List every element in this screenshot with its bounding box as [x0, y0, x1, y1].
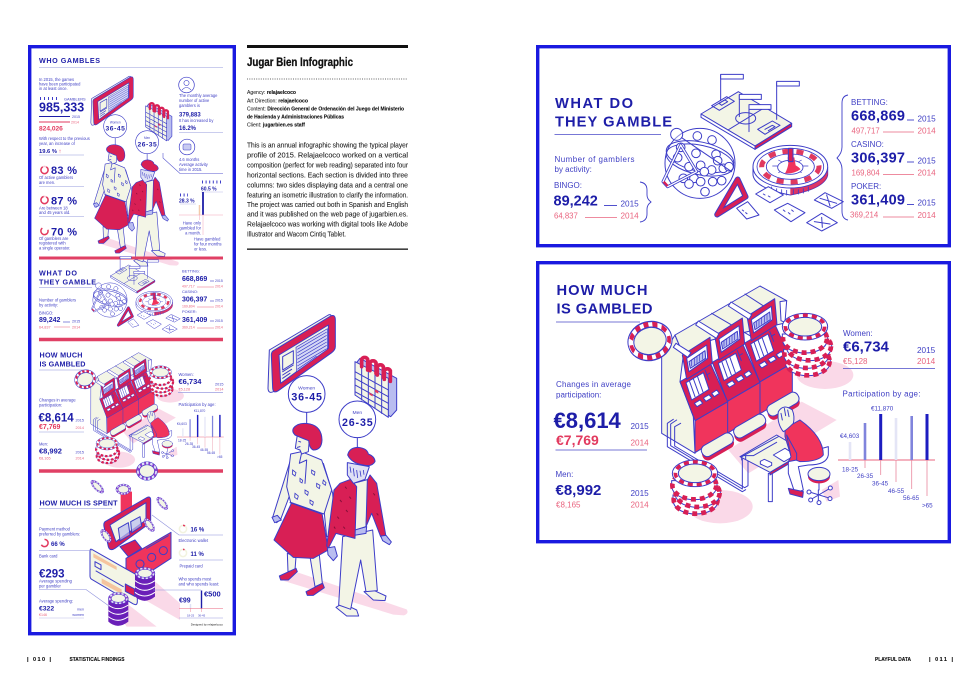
body text: Relajaelcoco was working with digital tools like Adobe: [247, 222, 408, 228]
text block: other payment methods and spending chart: €500: [204, 590, 221, 598]
stat: 70 percent single operator: Of gamblers are: [39, 236, 69, 241]
text block: games intro and total gamblers: GAMBLERS: [64, 96, 86, 102]
text block: average participation: 2015: [630, 422, 649, 431]
text block: average participation small: participation:: [39, 402, 62, 408]
text block: bingo small: by activity:: [39, 302, 58, 308]
bingo counts: BINGO:: [554, 181, 582, 190]
betting casino poker counts: CASINO:: [851, 140, 884, 149]
stat: 83 percent of gamblers are men: Of active gamblers: [39, 175, 73, 180]
text block: payment method: €322: [39, 606, 54, 612]
text block: betting casino poker small: 497,717: [182, 284, 195, 288]
chart: participation by age small: [177, 415, 224, 454]
back red box: [126, 532, 171, 581]
text block: other payment methods and spending chart: 18-25: [187, 614, 195, 618]
footer: right folio: [875, 657, 953, 663]
chip stack left: [672, 460, 720, 514]
text block: payment method: €146: [39, 613, 47, 617]
text block: monthly active gamblers: number of active: [179, 98, 210, 103]
credits: Client: jugarbien.es staff: [247, 122, 305, 128]
man head: [347, 463, 369, 483]
text block: payment method: Average spending: [39, 578, 73, 584]
text block: average participation: €8,614: [554, 408, 622, 433]
panel: project description: [247, 45, 409, 250]
panel: full vertical infographic: [30, 47, 234, 634]
text block: average participation small: €8,614: [38, 412, 74, 424]
text block: women small: 2014: [215, 388, 223, 392]
chart labels: 26-35: [857, 473, 874, 480]
coin stack right: [135, 567, 155, 601]
heading: what do they gamble small: WHAT DO: [39, 268, 77, 278]
chart labels small: [177, 409, 223, 459]
age bubble men: 26-35: [342, 417, 373, 429]
woman arms: [273, 462, 335, 537]
text block: payment method: per gambler: [39, 584, 61, 588]
man trousers: [339, 530, 377, 609]
body text: This is an annual infographic showing the typical player: [247, 142, 409, 150]
text block: bingo small: 2014: [72, 326, 80, 330]
bingo counts: 64,837: [554, 212, 578, 220]
body text: [247, 142, 409, 238]
bingo counts: Number of gamblers: [554, 155, 634, 164]
age bubble women: 36-45: [291, 392, 322, 404]
bingo counts: by activity:: [554, 165, 592, 174]
text block: betting casino poker small: 2015: [215, 319, 223, 323]
text block: average participation small: €8,992: [39, 446, 62, 456]
betting casino poker counts: 169,804: [852, 168, 880, 178]
heading: how much is gambled: IS GAMBLED: [556, 302, 652, 318]
text block: payment method: Bank card: [39, 554, 58, 558]
monitor stand: [120, 540, 142, 557]
text block: payment method: preferred by gamblers:: [39, 532, 80, 536]
age bubble men: Men: [352, 410, 362, 416]
chart labels: €11,870: [871, 406, 894, 412]
text block: other payment methods and spending chart: 11 %: [190, 552, 205, 558]
body text: columns: two sides displaying data and a central one: [247, 182, 408, 190]
text block: betting casino poker small: 2014: [215, 326, 223, 330]
chart: months gambled: for four months: [194, 242, 222, 246]
heading: how much is gambled small: HOW MUCH: [40, 350, 82, 360]
text block: betting casino poker small: 169,804: [182, 304, 195, 308]
text block: activity time: [163, 139, 223, 174]
chart: months gambled: Have only: [183, 220, 202, 226]
chart: months gambled: or less.: [194, 246, 207, 252]
credits: Content: Dirección General de Ordenación del Juego del Ministerio: [247, 106, 404, 112]
stat: 70 percent single operator: a single operator.: [39, 246, 70, 250]
credits: Agency: relajaelcoco: [247, 90, 296, 96]
body text: Illustrator and Wacom Cintiq Tablet.: [247, 232, 346, 238]
chart labels small: 36-45: [192, 445, 200, 449]
text block: average participation small: [38, 398, 84, 460]
betting casino poker counts: 2014: [918, 168, 936, 178]
body text: and it was published on the web page of jugarbien.es.: [247, 212, 408, 218]
cables: [667, 419, 748, 492]
text block: average participation: [554, 380, 649, 510]
head: [778, 407, 794, 432]
title: Jugar Bien Infographic: [247, 55, 353, 69]
chart labels: 36-45: [872, 480, 889, 488]
text block: average participation: Men:: [556, 470, 573, 479]
woman hair: [293, 423, 322, 450]
chart labels small: 56-65: [207, 451, 215, 455]
text block: games intro and total gamblers: 2015: [72, 115, 80, 119]
woman shirt: [287, 452, 332, 514]
text block: women small: 2015: [215, 382, 223, 386]
text block: other payment methods and spending chart: Who spends most: [178, 576, 212, 582]
man shirt: [353, 479, 368, 530]
chart labels: 56-65: [903, 495, 920, 502]
betting casino poker counts: 668,869: [851, 108, 905, 124]
icon: chip on divider: [136, 462, 158, 480]
woman shoes: [279, 568, 324, 595]
chart labels: €4,603: [840, 433, 860, 440]
man shoes: [336, 589, 386, 616]
torso: [785, 420, 823, 462]
playing cards: [737, 187, 843, 231]
betting casino poker counts: [837, 95, 936, 220]
stat: 87 percent aged 18 to 45: Are between 18: [39, 206, 68, 210]
betting casino poker counts: 2015: [918, 198, 936, 208]
text block: payment method: 66 %: [51, 542, 65, 548]
text block: games intro and total gamblers: have been participated: [39, 82, 81, 87]
text block: average participation: 2014: [630, 500, 649, 510]
text block: bingo small: 89,242: [39, 317, 61, 324]
text block: betting casino poker small: 2015: [215, 298, 223, 302]
man figure: [327, 447, 391, 616]
text block: activity time: time in 2015.: [179, 167, 202, 172]
credits: Art Direction: relajaelcoco: [247, 98, 308, 104]
slot machines: [680, 299, 792, 453]
section: how much is spent: [39, 478, 223, 627]
side wall and roof: [662, 335, 695, 453]
text block: games intro and total gamblers: in at least once.: [39, 86, 68, 91]
chart: months gambled: [179, 182, 223, 252]
stat: 83 percent of gamblers are men: [39, 165, 84, 186]
bingo counts: 2014: [620, 212, 639, 220]
chart labels: >65: [922, 502, 933, 510]
text block: monthly active gamblers: 16.2%: [179, 126, 197, 132]
betting casino poker counts: 361,409: [851, 192, 905, 208]
text block: games intro and total gamblers: 19.6 % ↑: [39, 149, 62, 155]
text block: other payment methods and spending chart: and who spends least:: [178, 582, 219, 586]
text block: bingo small: 64,837: [39, 326, 51, 330]
text block: games intro and total gamblers: year, an increase of: [39, 141, 76, 146]
text block: average participation small: Men:: [39, 442, 48, 446]
text block: bingo small: [39, 298, 80, 330]
drum handle: [671, 128, 683, 140]
body text: featuring an isometric illustration to clarify the information.: [247, 192, 408, 200]
text block: average participation: 2015: [630, 489, 649, 498]
footer: left folio: [27, 657, 125, 663]
text block: other payment methods and spending chart: Designed by relajaelcoco: [191, 622, 223, 626]
chart labels small: 46-55: [200, 448, 208, 452]
man hat: [348, 447, 375, 466]
text block: average participation: €7,769: [556, 432, 599, 448]
text block: other payment methods and spending chart: 16 %: [190, 528, 205, 534]
betting casino poker counts: 2015: [918, 114, 936, 124]
text block: betting casino poker small: 668,869: [182, 276, 207, 283]
text block: betting casino poker small: BETTING:: [182, 268, 200, 274]
illustration: slot machines, chips and gambler: [624, 286, 853, 523]
text block: average participation small: Changes in average: [39, 398, 76, 402]
chart labels small: €11,870: [194, 409, 206, 413]
text block: other payment methods and spending chart: Electronic wallet: [178, 538, 209, 543]
text block: payment method: €293: [39, 568, 65, 580]
text block: other payment methods and spending chart: 36-45: [198, 614, 206, 618]
illustration: screen card and coins: [89, 478, 180, 627]
text block: women: 2015: [917, 346, 936, 355]
bingo counts: [554, 155, 651, 222]
text block: women small: €5,128: [178, 388, 190, 392]
text block: women small: €6,734: [178, 377, 202, 386]
chart labels small: €4,603: [177, 422, 187, 426]
credits: de Hacienda y Administraciones Públicas: [247, 114, 344, 120]
text block: women small: [178, 372, 223, 407]
woman skirt: [274, 503, 328, 558]
text block: women: Women:: [843, 329, 873, 338]
text block: women: 2014: [917, 357, 936, 366]
chart labels: 18-25: [842, 466, 859, 474]
calendar icon: [356, 358, 397, 417]
stool: [808, 482, 830, 501]
text block: other payment methods and spending chart: €99: [179, 598, 191, 604]
betting casino poker counts: 2014: [918, 211, 936, 220]
woman figure: [272, 412, 357, 595]
text block: payment method: men: [77, 608, 84, 612]
seats: [699, 390, 802, 462]
text block: women: [842, 329, 936, 398]
footer: left folio: STATISTICAL FINDINGS: [70, 657, 125, 663]
text block: monthly active gamblers: The monthly average: [179, 93, 218, 98]
chart: participation by age: [838, 414, 935, 496]
roof bars: [673, 301, 787, 357]
heading: how much is gambled: [556, 283, 652, 318]
betting casino poker counts: POKER:: [851, 182, 881, 191]
text block: average participation small: €7,769: [39, 424, 61, 431]
section: who gambles: [39, 56, 223, 266]
text block: average participation: Changes in average: [556, 380, 632, 389]
heading: how much is spent: HOW MUCH IS SPENT: [40, 498, 118, 508]
text block: average participation: €8,992: [556, 482, 601, 499]
text block: monthly active gamblers: gamblers is: [179, 103, 200, 108]
text block: average participation: participation:: [556, 390, 601, 400]
chip stack right: [782, 313, 832, 376]
text block: betting casino poker small: 361,409: [182, 317, 207, 324]
right brace: [837, 95, 848, 220]
text block: payment method: Payment method: [39, 526, 71, 532]
panel: what do they gamble: [538, 47, 949, 246]
chart labels: 46-55: [888, 488, 905, 495]
text block: bingo small: 2015: [72, 320, 80, 324]
heading: how much is gambled small: IS GAMBLED: [40, 360, 86, 368]
heading: what do they gamble: [555, 96, 672, 130]
text block: other payment methods and spending chart: Prepaid card: [180, 564, 203, 568]
credits: [247, 90, 404, 128]
heading: who gambles: WHO GAMBLES: [39, 56, 100, 65]
text block: payment method: Average spending:: [39, 598, 73, 604]
text block: games intro and total gamblers: With respect to the previous: [39, 136, 90, 141]
text block: monthly active gamblers: It has increased by: [179, 118, 214, 123]
text block: women: €6,734: [843, 338, 890, 356]
text block: betting casino poker small: 306,397: [182, 296, 207, 304]
slot machine illustration small: [72, 353, 184, 468]
tablet icon: [268, 315, 331, 392]
bingo drum: [663, 128, 746, 215]
betting casino poker counts: 306,397: [851, 150, 905, 166]
age bubble men: [339, 401, 376, 438]
text block: other payment methods and spending chart: [152, 515, 223, 626]
stat: 70 percent single operator: [39, 226, 77, 250]
text block: games intro and total gamblers: 2014: [71, 120, 79, 124]
text block: average participation small: 2014: [76, 456, 84, 460]
text block: bingo small: Number of gamblers: [39, 298, 76, 302]
text block: women: €5,128: [843, 357, 868, 366]
stat: 87 percent aged 18 to 45: [39, 195, 84, 216]
text block: average participation small: 2014: [76, 426, 84, 430]
footer: left folio: | 010 |: [27, 657, 51, 663]
bingo counts: 2015: [620, 200, 639, 208]
text block: women: Participation by age:: [842, 390, 920, 398]
chip column: [121, 492, 132, 520]
floor shadow: [284, 573, 408, 615]
section: how much is gambled small: [38, 350, 224, 468]
body text: profile of 2015. Relajaelcoco worked on a vertical: [247, 152, 408, 160]
gambling games illustration small: [92, 256, 180, 333]
text block: women small: Participation by age:: [178, 402, 216, 407]
stat: 87 percent aged 18 to 45: 87 %: [51, 196, 77, 208]
blue stand: [663, 145, 697, 187]
betting casino poker counts: 2014: [918, 126, 936, 136]
woman legs: [287, 553, 322, 587]
coin stack left: [108, 592, 128, 626]
text block: betting casino poker small: CASINO:: [182, 289, 198, 294]
heading: how much is gambled small: [40, 350, 86, 368]
chart labels small: 26-35: [185, 442, 193, 446]
bingo counts: 89,242: [554, 194, 598, 210]
text block: payment method: [39, 526, 109, 618]
football pitch: [701, 74, 799, 149]
body text: horizontal sections. Each section is divided into three: [247, 172, 408, 180]
betting casino poker counts: BETTING:: [851, 98, 888, 107]
text block: bingo small: BINGO:: [39, 310, 53, 316]
text block: betting casino poker small: POKER:: [182, 309, 197, 314]
text block: games intro and total gamblers: In 2015, the games: [39, 77, 74, 82]
monitor: [104, 497, 151, 550]
body text: The project was carried out both in Spanish and English: [247, 202, 408, 209]
text block: betting casino poker small: 2014: [215, 304, 223, 308]
stat: 70 percent single operator: registered with: [39, 240, 66, 246]
text block: average participation: 2014: [630, 438, 649, 448]
age bubble women: [288, 376, 325, 412]
red stand: [717, 179, 746, 215]
chart: months gambled: Have gambled: [194, 236, 221, 242]
text block: betting casino poker small: [182, 268, 223, 330]
chart: months gambled: gambled for: [179, 226, 202, 230]
chart: months gambled: 60.5 %: [201, 186, 217, 192]
text block: average participation: €8,165: [556, 500, 581, 510]
text block: games intro and total gamblers: 985,333: [39, 100, 84, 114]
text block: betting casino poker small: 2014: [215, 284, 223, 288]
betting casino poker counts: 2015: [918, 156, 936, 166]
gambler: [778, 407, 832, 505]
text block: average participation small: €8,165: [39, 456, 51, 460]
man jacket: [327, 475, 386, 548]
text block: monthly active gamblers: [179, 77, 223, 132]
chart labels: [840, 406, 933, 510]
text block: women small: Women:: [178, 372, 194, 377]
chart labels small: >65: [217, 455, 223, 459]
heading: what do they gamble small: [39, 268, 96, 286]
illustration: man and woman large: [268, 315, 408, 616]
text block: betting casino poker small: 369,214: [182, 326, 195, 330]
heading: what do they gamble: WHAT DO: [555, 96, 633, 112]
chart: months gambled: a month.: [185, 230, 201, 236]
betting casino poker counts: 497,717: [852, 126, 880, 136]
stat: 87 percent aged 18 to 45: and 45 years old.: [39, 210, 70, 215]
footer: right folio: | 011 |: [929, 657, 953, 663]
chart: months gambled: 28.3 %: [179, 198, 195, 204]
heading: what do they gamble small: THEY GAMBLE: [39, 278, 96, 286]
woman face: [295, 435, 309, 454]
heading: what do they gamble: THEY GAMBLE: [555, 114, 672, 130]
people illustration small: [91, 76, 179, 266]
text block: payment method: women: [72, 613, 84, 617]
text block: activity time: 4.6 months: [179, 157, 199, 162]
stat: 70 percent single operator: 70 %: [51, 226, 77, 238]
text block: activity time: Average activity: [179, 162, 209, 167]
age bubble women: Women: [298, 385, 315, 391]
text block: average participation small: 2015: [76, 418, 84, 422]
text block: average participation small: 2015: [76, 450, 84, 454]
footer: right folio: PLAYFUL DATA: [875, 657, 911, 663]
illustration: football pitch, bingo, roulette and cards: [663, 74, 843, 231]
roulette wheel: [753, 145, 828, 195]
chart labels small: 18-25: [178, 438, 186, 442]
bank card: [90, 549, 137, 605]
text block: monthly active gamblers: 379,883: [179, 112, 201, 118]
man hands: [327, 535, 391, 561]
section: what do they gamble small: [39, 256, 223, 333]
desk: [740, 435, 807, 502]
left brace: [640, 182, 651, 222]
panel: how much is gambled: [538, 263, 949, 542]
betting casino poker counts: 369,214: [850, 210, 879, 220]
text block: games intro and total gamblers: [39, 77, 90, 155]
body text: composition (perfect for web reading) separated into four: [247, 162, 409, 170]
stat: 83 percent of gamblers are men: are men.: [39, 180, 55, 185]
heading: how much is gambled: HOW MUCH: [556, 283, 648, 299]
stat: 83 percent of gamblers are men: 83 %: [51, 165, 77, 177]
text block: betting casino poker small: 2015: [215, 279, 223, 283]
text block: games intro and total gamblers: 824,026: [39, 126, 63, 132]
floor shadows: [687, 361, 853, 523]
chip left: [624, 317, 676, 365]
